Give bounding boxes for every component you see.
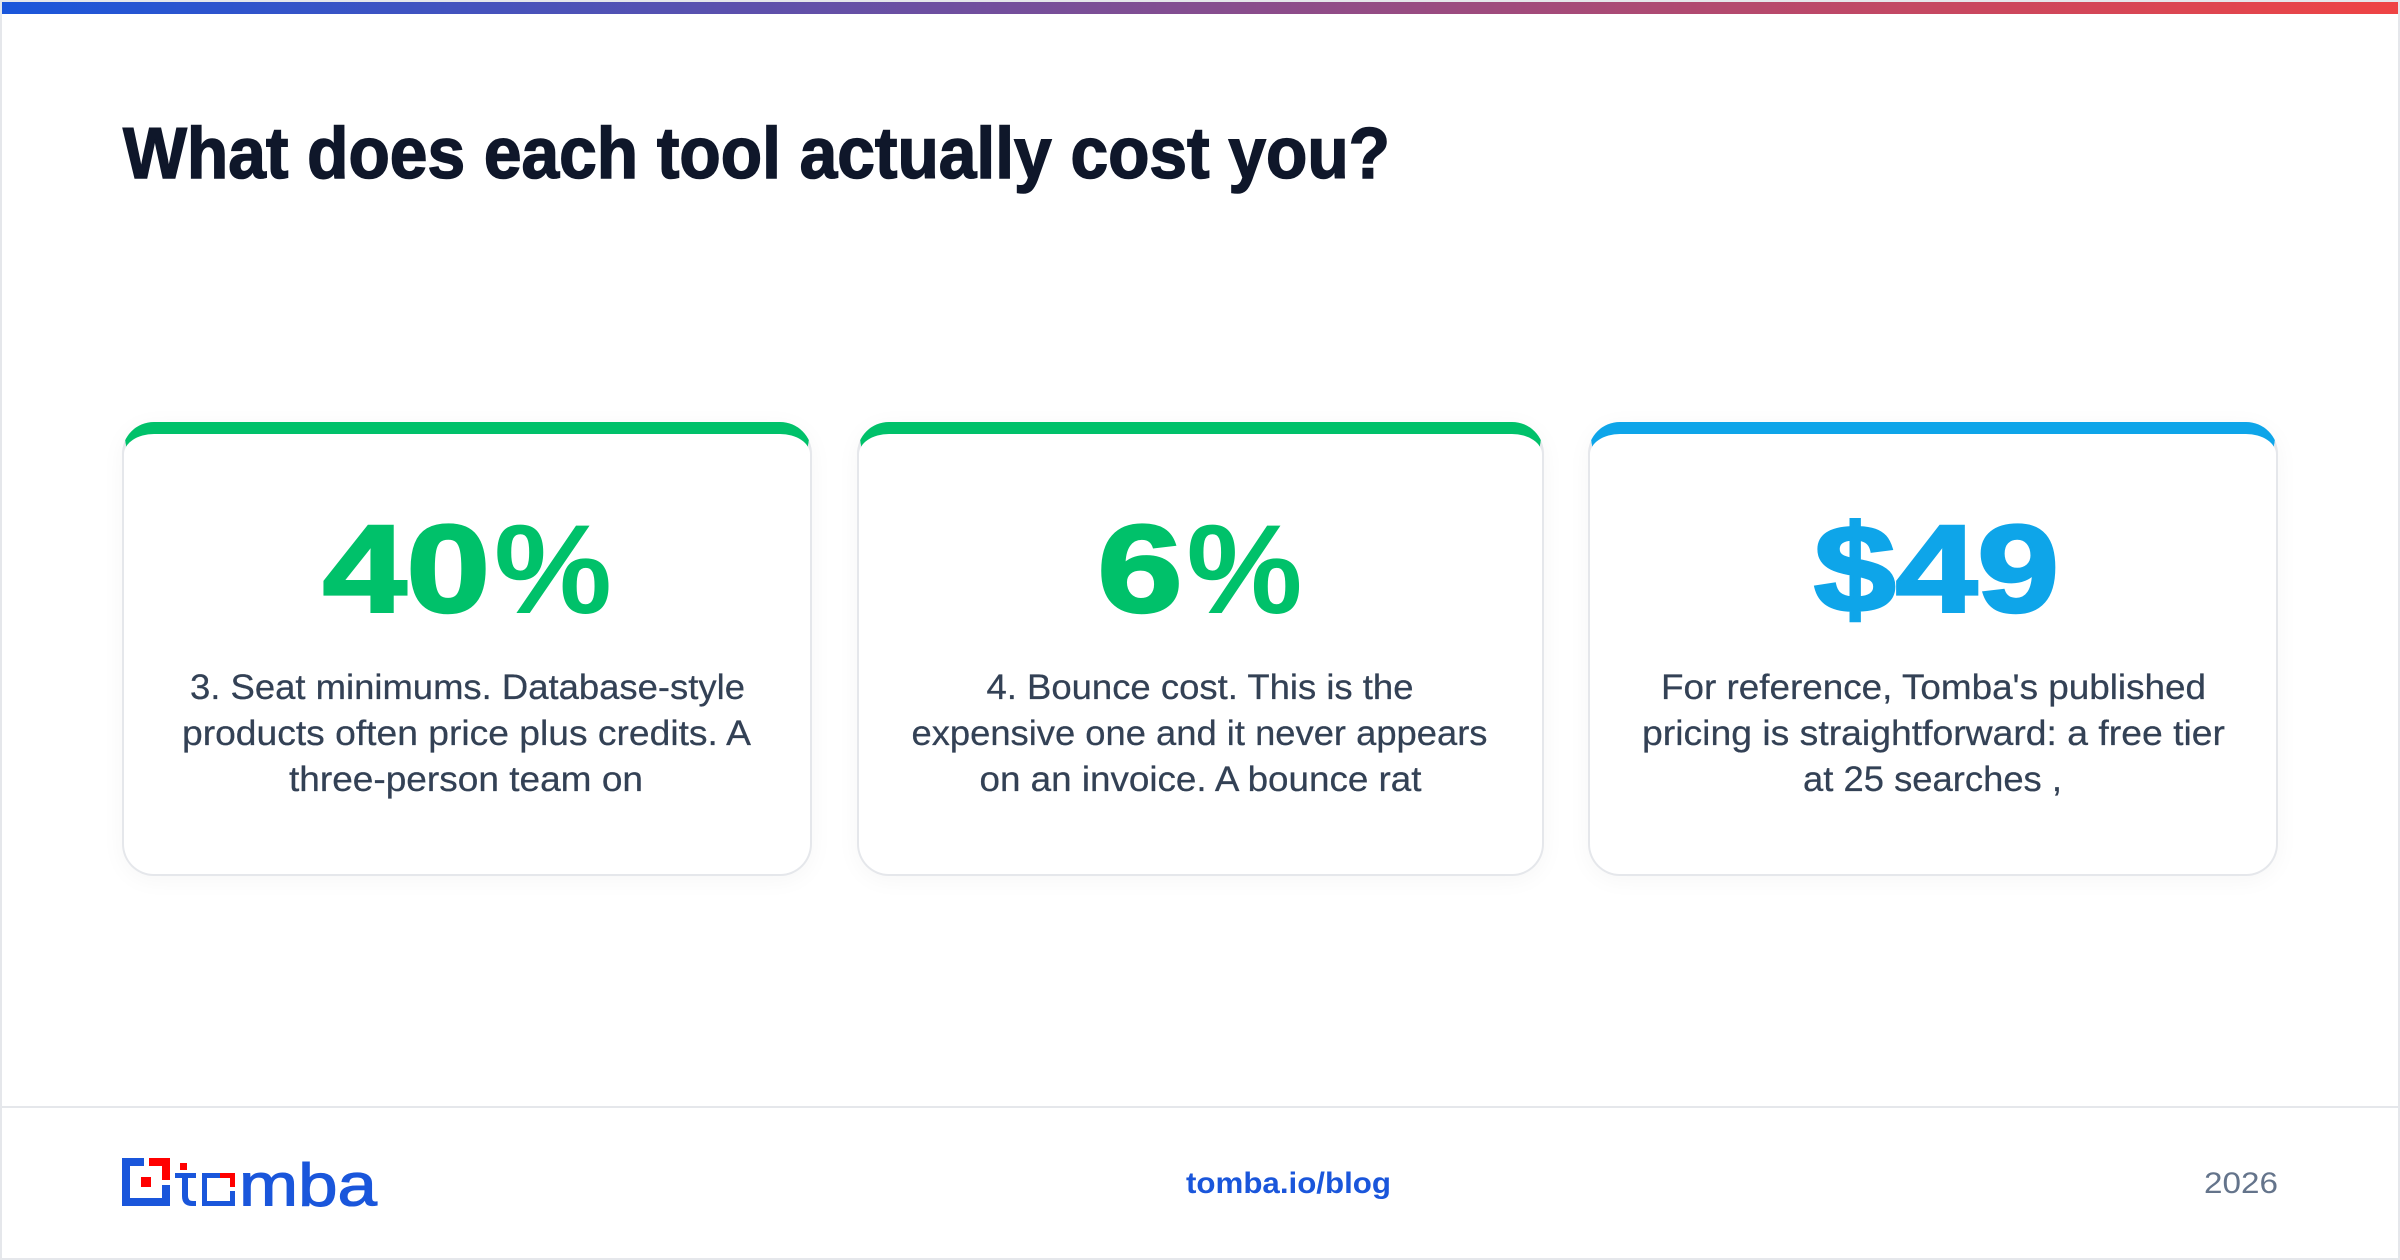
title: What does each tool actually cost you?	[123, 114, 1390, 194]
text block: seat minimums: 3. Seat minimums. Database-style	[190, 668, 745, 707]
footer divider	[0, 1106, 2400, 1108]
text block: bounce cost: expensive one and it never appears	[911, 714, 1487, 753]
logo: tomba	[122, 1152, 378, 1218]
text block: bounce cost: on an invoice. A bounce rat	[979, 760, 1421, 799]
icon: logo square	[122, 1158, 170, 1206]
panel: seat minimums card	[122, 422, 812, 876]
text block: bounce cost	[911, 668, 1487, 799]
text block: Tomba pricing	[1642, 668, 2225, 799]
text block: seat minimums: three-person team on	[289, 760, 643, 799]
logo wordmark: mba	[239, 1152, 378, 1218]
text block: seat minimums: products often price plus credits. A	[182, 714, 752, 753]
stat: 40%	[323, 498, 612, 640]
text block: bounce cost: 4. Bounce cost. This is the	[986, 668, 1413, 707]
panel: bounce cost card	[856, 422, 1544, 876]
panel: Tomba pricing card	[1588, 422, 2278, 876]
stat: 40%: 40	[323, 500, 490, 638]
stat: 6%: %	[1186, 498, 1302, 640]
top gradient bar	[2, 2, 2398, 14]
footer year: 2026	[2204, 1167, 2278, 1200]
stat: $49: $49	[1814, 500, 2059, 638]
text block: Tomba pricing: pricing is straightforward: a free tier	[1642, 714, 2225, 753]
stat: 40%: %	[494, 498, 612, 640]
stat: 6%	[1097, 498, 1302, 640]
text block: seat minimums	[182, 668, 752, 799]
stat: 6%: 6	[1097, 500, 1182, 638]
text block: Tomba pricing: at 25 searches ,	[1803, 760, 2062, 799]
footer link: tomba.io/blog	[1186, 1167, 1391, 1200]
icon: logo letter t	[175, 1163, 196, 1206]
icon: logo letter o	[202, 1173, 235, 1206]
text block: Tomba pricing: For reference, Tomba's published	[1661, 668, 2206, 707]
